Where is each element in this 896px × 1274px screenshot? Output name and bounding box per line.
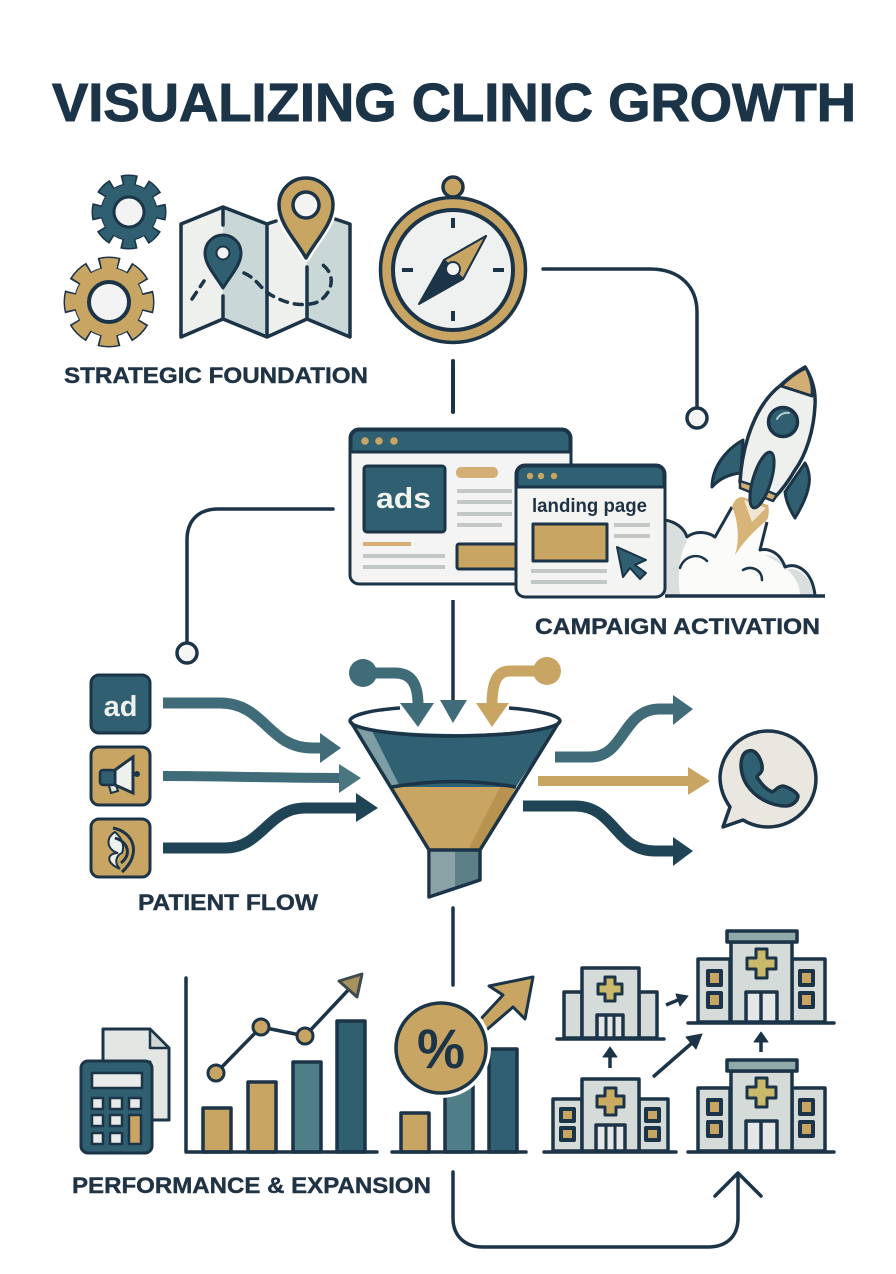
- icon: upward arrow: [478, 977, 533, 1033]
- connector: funnel to performance: [451, 908, 455, 985]
- icon: funnel: [350, 708, 560, 897]
- arrow: megaphone to funnel: [163, 764, 361, 793]
- arrow: navy output: [523, 806, 693, 866]
- landing page label: landing page: [532, 496, 647, 517]
- panel: strategic foundation: [70, 177, 526, 342]
- arrow: phone to funnel: [163, 793, 378, 848]
- heading: patient flow: PATIENT FLOW: [138, 890, 318, 915]
- arrow: teal input into funnel: [349, 659, 434, 727]
- icon: cursor: [617, 547, 646, 579]
- icon: calculator and document: [81, 1029, 169, 1153]
- panel: patient flow: [91, 657, 816, 897]
- icon: medium clinic bottom left: [544, 1079, 676, 1152]
- icon: phone call badge: [91, 819, 150, 877]
- arrow: gold input into funnel: [476, 657, 561, 727]
- icon: rocket: [712, 367, 815, 555]
- icon: large clinic top: [688, 931, 834, 1023]
- icon: ads browser window: [350, 429, 571, 584]
- arrow: ad to funnel: [163, 703, 341, 763]
- icon: teal location pin: [205, 235, 241, 288]
- heading: performance and expansion: PERFORMANCE & EXPANSION: [72, 1173, 431, 1198]
- panel: performance and expansion: [81, 931, 834, 1153]
- icon: tan gear: [70, 263, 148, 341]
- title: VISUALIZING CLINIC GROWTH: [52, 73, 856, 133]
- icon: large clinic bottom right: [688, 1060, 834, 1152]
- icon: megaphone badge: [91, 747, 150, 805]
- panel: campaign activation: [350, 367, 825, 597]
- arrow: teal output: [555, 695, 693, 757]
- percent label: %: [417, 1017, 465, 1080]
- icon: landing page browser window: [516, 465, 665, 597]
- icon: compass: [380, 177, 526, 342]
- chart: growth bar chart with trend line: [186, 974, 377, 1152]
- icon: small clinic: [557, 968, 664, 1039]
- ads label: ads: [376, 483, 431, 515]
- icon: folded map: [181, 207, 350, 337]
- icon: rocket launch cloud: [665, 507, 825, 596]
- connector: compass to rocket: [543, 269, 707, 428]
- icon: ad badge: ad: [104, 691, 137, 723]
- connector: campaign to patient flow: [177, 509, 333, 663]
- icon: tan location pin: [279, 178, 333, 258]
- heading: strategic foundation: STRATEGIC FOUNDATION: [64, 363, 368, 388]
- arrow: center input into funnel: [440, 700, 467, 723]
- icon: teal gear: [97, 180, 161, 244]
- icon: ad badge: [91, 675, 150, 733]
- arrow: gold output: [538, 767, 710, 795]
- chart: bars with percent badge: [391, 977, 533, 1152]
- arrows: clinic expansion: [603, 994, 768, 1077]
- icon: whatsapp phone bubble: [720, 731, 816, 827]
- connector: campaign to funnel: [451, 600, 455, 700]
- heading: campaign activation: CAMPAIGN ACTIVATION: [535, 614, 820, 639]
- connector: compass to campaign: [451, 361, 455, 412]
- arrow: expansion loop: [453, 1172, 761, 1247]
